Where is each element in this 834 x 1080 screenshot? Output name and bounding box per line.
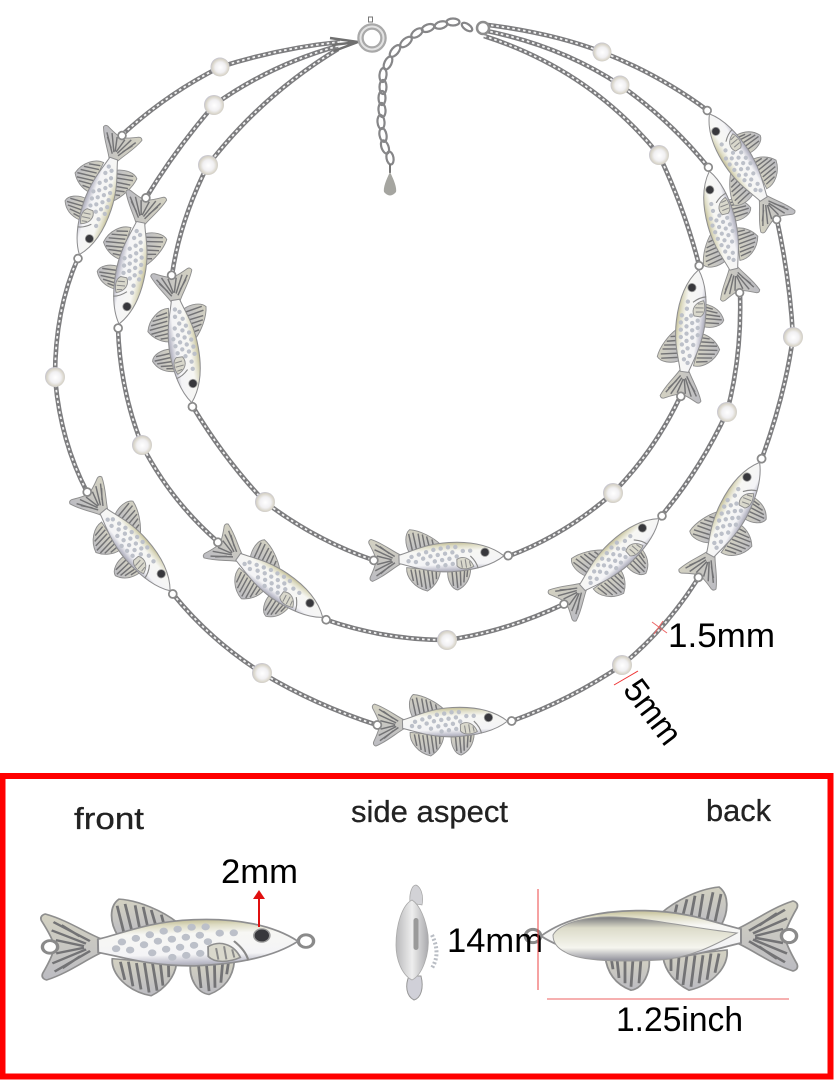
label: back: back bbox=[706, 793, 771, 828]
extender chain with drop bbox=[377, 18, 489, 196]
chain width measurement: 1.5mm bbox=[668, 617, 775, 655]
pearls bbox=[45, 42, 803, 683]
fish charm, middle strand lower right bbox=[541, 492, 686, 631]
fish charm, outer strand top left bbox=[47, 121, 150, 272]
fish charm, middle strand top right bbox=[680, 156, 771, 304]
front view fish bbox=[40, 895, 315, 998]
fish charm, outer strand bottom centre bbox=[372, 692, 517, 758]
label: 1.25inch: 1.25inch bbox=[616, 1001, 743, 1039]
label: 2mm: 2mm bbox=[221, 853, 298, 891]
fish charm, middle strand lower left bbox=[196, 516, 346, 648]
eye size arrow bbox=[253, 890, 265, 927]
fish charm, middle strand top left bbox=[86, 187, 175, 338]
fish charm, outer strand lower left bbox=[60, 470, 198, 618]
fish charm, inner strand left bbox=[139, 266, 222, 416]
middle chain strand bbox=[118, 30, 740, 640]
panel border bbox=[2, 776, 830, 1076]
label: side aspect: side aspect bbox=[351, 794, 508, 829]
pearl size measurement: 5mm bbox=[616, 672, 689, 752]
side view fish bbox=[396, 885, 436, 1000]
outer chain strand bbox=[55, 24, 793, 725]
inner chain strand bbox=[172, 36, 699, 560]
length measure line bbox=[547, 998, 789, 1000]
fish charm, outer strand lower right bbox=[670, 441, 792, 597]
height measure line bbox=[537, 889, 539, 990]
fish charm, inner strand right bbox=[652, 258, 731, 405]
fish charm, inner strand bottom centre bbox=[368, 526, 513, 593]
necklace bbox=[45, 17, 805, 758]
label: front: front bbox=[74, 801, 144, 836]
label: 14mm: 14mm bbox=[447, 922, 543, 960]
spring ring clasp bbox=[330, 17, 384, 51]
back view fish bbox=[525, 887, 798, 990]
fish charm, outer strand top right bbox=[681, 90, 805, 238]
panel: charm views bbox=[2, 776, 830, 1076]
